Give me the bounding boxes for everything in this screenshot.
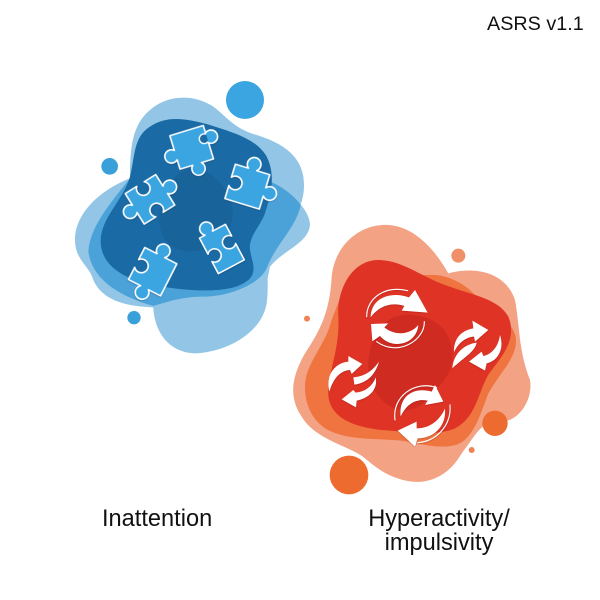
blob: inner red <box>368 315 452 410</box>
icon: puzzle piece top <box>159 122 227 183</box>
blob: mid blue overlap <box>88 178 301 306</box>
icon: puzzle piece left <box>115 168 185 231</box>
circle: small blue left <box>101 158 118 175</box>
label: Hyperactivity/impulsivity: Hyperactivity/ <box>368 506 510 532</box>
icon: puzzle piece centre <box>194 214 244 274</box>
icon: puzzle piece right <box>225 153 285 213</box>
blob: light blue top layer <box>130 98 304 353</box>
circle: tiny bottom <box>469 447 475 453</box>
panel: inattention blob <box>75 81 310 353</box>
blob: inner dark blue <box>159 169 233 252</box>
icon: cycle arrows left <box>328 356 379 407</box>
blob: dark blue core <box>101 119 272 290</box>
blob: salmon outer layer <box>293 225 530 482</box>
icon: cycle arrows right <box>452 321 501 371</box>
label: ASRS v1.1: ASRS v1.1 <box>487 13 584 35</box>
circle: small blue bottom <box>127 311 141 324</box>
panel: hyperactivity blob <box>293 225 530 494</box>
circle: tiny left <box>304 316 310 322</box>
blob: orange middle layer <box>305 275 516 447</box>
blob: light blue left layer <box>75 178 310 307</box>
label: Inattention: Inattention <box>102 506 212 532</box>
label: Hyperactivity/impulsivity: impulsivity <box>385 530 494 556</box>
circle: salmon top right <box>451 249 465 263</box>
circle: medium orange <box>482 411 508 436</box>
circle: large blue <box>226 81 264 119</box>
icon: cycle arrows top <box>367 289 428 348</box>
blob: dark red core <box>328 260 511 433</box>
icon: cycle arrows bottom <box>395 385 450 447</box>
icon: puzzle piece bottom <box>123 237 182 307</box>
circle: large orange <box>330 456 368 494</box>
